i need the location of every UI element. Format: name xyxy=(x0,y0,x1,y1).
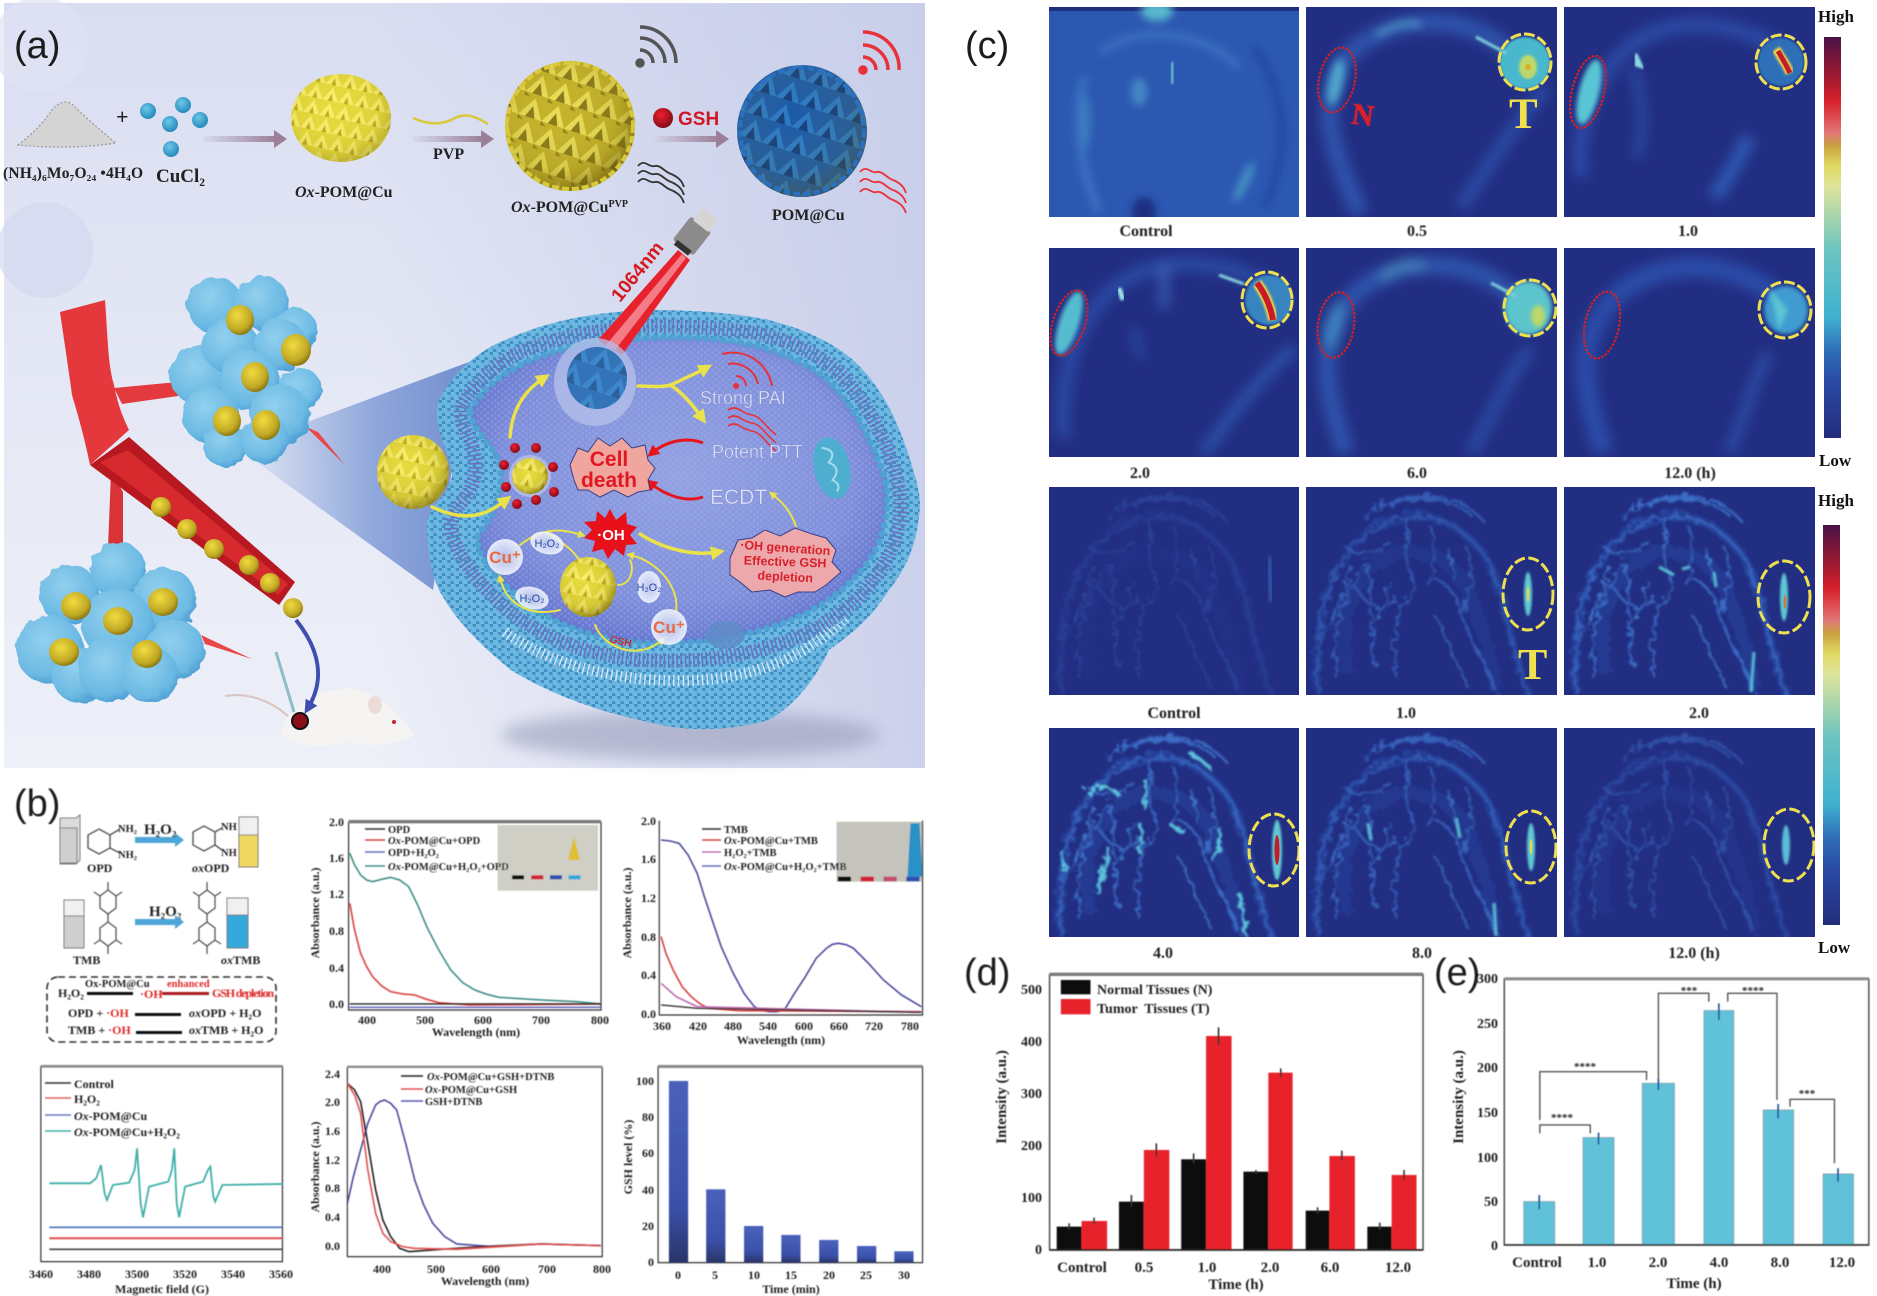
chart: GSH level bars xyxy=(621,1065,923,1296)
axis labels d: 300 xyxy=(1021,1087,1042,1102)
dashed box: reaction equations: enhanced xyxy=(167,979,210,990)
panel: (d) intensity bar chart xyxy=(964,952,1423,1293)
chart: TMB absorbance: 540 xyxy=(759,1019,777,1033)
burst: hydroxyl radical: ·OH xyxy=(597,527,625,544)
axis labels d: Control xyxy=(1057,1260,1107,1276)
text: CuCl2: CuCl₂ xyxy=(156,166,205,187)
reaction scheme: TMB: H₂O₂ xyxy=(149,904,182,920)
axis labels e: 8.0 xyxy=(1771,1255,1789,1271)
axis labels e: 150 xyxy=(1477,1106,1498,1121)
chart: TMB absorbance: 360 xyxy=(653,1019,671,1033)
arrows: red to cell death xyxy=(650,440,703,499)
chart: EPR spectra: 3460 xyxy=(29,1267,53,1281)
significance marks: *** xyxy=(1681,985,1698,997)
chart: OPD absorbance: 500 xyxy=(416,1013,434,1027)
lysosome blob xyxy=(705,621,745,649)
chart: GSH depletion spectra: 400 xyxy=(373,1262,391,1276)
axis labels e: 0 xyxy=(1491,1239,1498,1254)
chart: EPR spectra xyxy=(29,1065,293,1296)
image: 1.0 h row 3: T xyxy=(1518,640,1547,689)
chart: GSH depletion spectra: Absorbance (a.u.) xyxy=(308,1121,322,1213)
PVP curve xyxy=(413,116,488,124)
chart: OPD absorbance: 2.0 xyxy=(329,815,344,829)
text: ECDT: ECDT xyxy=(710,486,767,509)
panel: (a) mechanism schematic xyxy=(0,0,925,768)
bubbles: H2O2: H₂O₂ xyxy=(519,593,545,605)
reaction scheme: OPD xyxy=(60,815,258,875)
legend d: Tumor Tissues (T) xyxy=(1097,1002,1210,1017)
big nanoparticle entering xyxy=(377,435,449,509)
axis labels e: 300 xyxy=(1477,972,1498,987)
bars and frame xyxy=(1050,973,1423,1250)
axis labels d: 0 xyxy=(1035,1243,1042,1258)
chart: GSH level bars: 0 xyxy=(675,1268,681,1282)
image: 0.5 h: N xyxy=(1350,97,1376,133)
text: Ox-POM@Cu PVP: Ox-POM@Cu xyxy=(511,199,609,216)
chart: GSH level bars: 20 xyxy=(642,1219,654,1233)
text: GSH in cycle: GSH xyxy=(609,635,632,650)
chart: TMB absorbance: 780 xyxy=(901,1019,919,1033)
chart: TMB absorbance: Ox-POM@Cu+H₂O₂+TMB xyxy=(724,862,847,873)
icon: red signal in cell xyxy=(722,353,772,388)
axis labels e: 50 xyxy=(1484,1195,1498,1210)
label: (b): (b) xyxy=(14,783,60,825)
labels: top image rows xyxy=(1119,223,1716,482)
chart: EPR spectra: Control xyxy=(74,1077,114,1091)
colorbar bottom: Low xyxy=(1818,938,1851,957)
chart: TMB absorbance: 0.8 xyxy=(641,930,656,944)
axis labels d: 12.0 xyxy=(1385,1260,1411,1276)
axis labels d: 6.0 xyxy=(1321,1260,1339,1276)
tumour cluster lower xyxy=(16,542,205,703)
chart: OPD absorbance: 0.4 xyxy=(329,961,344,975)
chart: TMB absorbance: 1.6 xyxy=(641,852,656,866)
chart: GSH level bars: 100 xyxy=(636,1074,654,1088)
dashed box: reaction equations: TMB + ·OH xyxy=(68,1023,132,1037)
icon: molybdate powder xyxy=(18,102,116,147)
chart: TMB absorbance: 2.0 xyxy=(641,814,656,828)
axis labels e: 200 xyxy=(1477,1061,1498,1076)
central nanoparticle xyxy=(560,557,616,617)
significance marks: **** xyxy=(1742,985,1764,997)
dashed box: reaction equations: ·OH xyxy=(140,987,163,1001)
icon: red signal xyxy=(860,32,899,73)
axis labels d: Time (h) xyxy=(1208,1277,1264,1293)
chart: TMB absorbance: 600 xyxy=(795,1019,813,1033)
axis labels e: 1.0 xyxy=(1588,1255,1606,1271)
labels: top image rows: Control xyxy=(1119,223,1173,240)
chart: EPR spectra: 3500 xyxy=(125,1267,149,1281)
chart: OPD absorbance: 800 xyxy=(591,1013,609,1027)
label: (c): (c) xyxy=(965,25,1009,67)
labels: top image rows: 1.0 xyxy=(1678,223,1698,240)
axis labels e: 4.0 xyxy=(1710,1255,1728,1271)
icon: black heat waves xyxy=(638,163,684,203)
chart: TMB absorbance: 420 xyxy=(689,1019,707,1033)
axis labels d: 0.5 xyxy=(1135,1260,1153,1276)
laser head xyxy=(671,205,720,258)
sphere: Ox-POM@Cu xyxy=(291,74,391,162)
chart: GSH depletion spectra: 500 xyxy=(427,1262,445,1276)
chart: OPD absorbance: OPD+H₂O₂ xyxy=(388,848,439,859)
text: 1064nm: 1064nm xyxy=(608,238,668,306)
plus sign: + xyxy=(116,104,129,129)
nanoparticles in vessel xyxy=(151,497,303,618)
significance marks: **** xyxy=(1574,1061,1596,1073)
shadow of the cell xyxy=(500,711,880,759)
chart: TMB absorbance: 660 xyxy=(830,1019,848,1033)
chart: GSH level bars: 60 xyxy=(642,1146,654,1160)
axis labels d xyxy=(994,983,1411,1293)
chart: EPR spectra: 3540 xyxy=(221,1267,245,1281)
dashed box: reaction equations: Ox-POM@Cu xyxy=(85,979,150,990)
axis labels d: 100 xyxy=(1021,1191,1042,1206)
sphere: Ox-POM@Cu PVP xyxy=(505,61,635,191)
chart: GSH level bars: 30 xyxy=(898,1268,910,1282)
labels: lower image rows: 2.0 xyxy=(1689,705,1709,722)
image: 0.5 h: T xyxy=(1509,91,1538,138)
chart: GSH level bars: 40 xyxy=(642,1183,654,1197)
chart: GSH depletion spectra: 2.4 xyxy=(325,1067,340,1081)
bubble: Cu+ left xyxy=(487,539,523,575)
thorn vessels xyxy=(201,427,345,659)
chart: GSH level bars: 0 xyxy=(648,1255,654,1269)
chart: TMB absorbance: 480 xyxy=(724,1019,742,1033)
chart: GSH depletion spectra: 0.0 xyxy=(325,1239,340,1253)
image: 1.0 h row 3 xyxy=(1306,487,1557,695)
burst: OH generation callout: Effective GSH xyxy=(744,554,827,570)
chart: TMB absorbance: Wavelength (nm) xyxy=(737,1033,825,1047)
chart: OPD absorbance: Ox-POM@Cu+H₂O₂+OPD xyxy=(388,862,509,873)
bubbles: H2O2: H₂O₂ xyxy=(636,582,662,594)
chart: TMB absorbance: 0.4 xyxy=(641,968,656,982)
dashed box: reaction equations: H₂O₂ xyxy=(58,986,84,1000)
labels: lower image rows: 1.0 xyxy=(1396,705,1416,722)
axis labels e: 12.0 xyxy=(1829,1255,1855,1271)
labels: lower image rows: Control xyxy=(1147,705,1201,722)
chart: EPR spectra: Ox-POM@Cu xyxy=(74,1109,147,1123)
dashed box: reaction equations: OPD + ·OH xyxy=(68,1006,130,1020)
axis labels d: Intensity (a.u.) xyxy=(994,1050,1010,1144)
bubbles: H2O2 xyxy=(513,528,662,613)
mouse xyxy=(225,652,415,746)
chart: EPR spectra: Magnetic field (G) xyxy=(115,1282,209,1296)
chart: GSH level bars: 5 xyxy=(712,1268,718,1282)
chart: OPD absorbance: Wavelength (nm) xyxy=(432,1025,520,1039)
chart: GSH depletion spectra: 700 xyxy=(538,1262,556,1276)
label: (e): (e) xyxy=(1434,952,1480,994)
chart: OPD absorbance: 0.0 xyxy=(329,997,344,1011)
chart: TMB absorbance: 720 xyxy=(865,1019,883,1033)
chart: OPD absorbance xyxy=(308,815,609,1039)
image: 4.0 h xyxy=(1049,728,1299,937)
chart: OPD absorbance: 700 xyxy=(532,1013,550,1027)
labels: lower image rows: 12.0 (h) xyxy=(1668,945,1720,962)
chart: GSH depletion spectra xyxy=(308,1066,611,1288)
chart: GSH level bars: 15 xyxy=(785,1268,797,1282)
chart: OPD absorbance: OPD xyxy=(388,825,411,836)
image: 12.0 h xyxy=(1564,248,1815,457)
colorbar top xyxy=(1818,7,1854,470)
dashed box: reaction equations: GSH depletion xyxy=(212,986,274,1000)
axis labels e: 250 xyxy=(1477,1017,1498,1032)
chart: EPR spectra: H₂O₂ xyxy=(74,1092,100,1106)
bubble: Cu+ right: Cu⁺ xyxy=(653,618,685,637)
chart: GSH level bars: GSH level (%) xyxy=(621,1120,635,1194)
burst: OH generation callout: depletion xyxy=(757,569,813,585)
dashed box: reaction equations: oxTMB + H₂O xyxy=(189,1023,263,1037)
labels: lower image rows xyxy=(1147,705,1720,962)
reaction scheme: TMB xyxy=(64,882,260,967)
chart: OPD absorbance: 600 xyxy=(474,1013,492,1027)
text: Ox-POM@Cu PVP: PVP xyxy=(609,199,628,210)
icon: grey signal xyxy=(637,27,676,66)
dashed box: reaction equations: oxOPD + H₂O xyxy=(189,1006,261,1020)
image: 0.5 h xyxy=(1306,7,1557,217)
reaction scheme: OPD: NH₂ xyxy=(118,824,137,835)
chart: EPR spectra: 3560 xyxy=(269,1267,293,1281)
burst: OH generation callout xyxy=(730,528,841,597)
image: 8.0 h xyxy=(1306,728,1557,937)
image: control row 1 xyxy=(1049,7,1299,217)
arrow: injection xyxy=(296,620,318,708)
chart: TMB absorbance: H₂O₂+TMB xyxy=(724,848,777,859)
zoom cone xyxy=(237,362,469,590)
chart: OPD absorbance: Absorbance (a.u.) xyxy=(308,867,322,959)
labels: lower image rows: 4.0 xyxy=(1153,945,1173,962)
reaction scheme: OPD: NH₂ xyxy=(118,850,137,861)
chart: TMB absorbance: Absorbance (a.u.) xyxy=(620,867,634,959)
chart: GSH depletion spectra: Ox-POM@Cu+GSH+DTNB xyxy=(427,1072,554,1083)
image: 1.0 h xyxy=(1564,7,1815,217)
significance marks xyxy=(1551,985,1816,1124)
legend d xyxy=(1097,983,1213,1017)
chart: GSH depletion spectra: GSH+DTNB xyxy=(425,1097,482,1108)
panel: (c) photoacoustic imaging xyxy=(965,1,1854,962)
axis labels e: Control xyxy=(1512,1255,1562,1271)
POM in vesicle xyxy=(554,338,636,426)
chart: GSH level bars: 80 xyxy=(642,1110,654,1124)
image: 2.0 h xyxy=(1049,248,1299,457)
axis labels e: 2.0 xyxy=(1649,1255,1667,1271)
blood vessel xyxy=(60,300,295,605)
axis labels d: 500 xyxy=(1021,983,1042,998)
chart: GSH depletion spectra: 0.8 xyxy=(325,1181,340,1195)
colorbar bottom xyxy=(1818,491,1854,957)
bubble: Cu+ left: Cu⁺ xyxy=(489,548,521,567)
text: POM@Cu: POM@Cu xyxy=(772,207,845,224)
text: ammonium molybdate: (NH₄)₆Mo₇O₂₄ •4H₄O xyxy=(3,165,143,182)
chart: TMB absorbance: TMB xyxy=(724,825,748,836)
icon: red heat waves xyxy=(860,169,906,213)
axis labels e: Intensity (a.u.) xyxy=(1451,1050,1467,1144)
laser beam xyxy=(598,250,690,355)
chart: GSH level bars: 10 xyxy=(748,1268,760,1282)
chart: OPD absorbance: 1.2 xyxy=(329,887,344,901)
icon: GSH ball xyxy=(653,108,673,128)
bubble: Cu+ right xyxy=(651,609,687,645)
chart: TMB absorbance: 1.2 xyxy=(641,891,656,905)
colorbar top: High xyxy=(1818,7,1854,26)
chart: GSH depletion spectra: 1.6 xyxy=(325,1124,340,1138)
chart: EPR spectra: Ox-POM@Cu+H₂O₂ xyxy=(74,1125,180,1139)
label: (a): (a) xyxy=(14,25,60,67)
chart: EPR spectra: 3480 xyxy=(77,1267,101,1281)
chart: TMB absorbance: Ox-POM@Cu+TMB xyxy=(724,836,818,847)
text: Potent PTT: Potent PTT xyxy=(712,442,803,462)
chart: GSH level bars: Time (min) xyxy=(762,1282,820,1296)
chart: GSH depletion spectra: 800 xyxy=(593,1262,611,1276)
burst: OH generation callout: ·OH generation xyxy=(740,538,831,558)
chart: GSH level bars: 20 xyxy=(823,1268,835,1282)
burst: Cell death: Cell xyxy=(590,448,628,471)
colorbar top: Low xyxy=(1819,451,1852,470)
axis labels d: 1.0 xyxy=(1198,1260,1216,1276)
chart: GSH depletion spectra: 0.4 xyxy=(325,1210,340,1224)
sphere: POM@Cu xyxy=(737,65,867,197)
icon: CuCl2 dots xyxy=(140,97,208,157)
tumour cluster upper xyxy=(170,276,322,467)
image: control row 3 xyxy=(1049,487,1299,695)
significance marks: **** xyxy=(1551,1112,1574,1124)
dashed box: reaction equations xyxy=(47,977,276,1042)
significance marks: *** xyxy=(1799,1088,1816,1100)
chart: GSH depletion spectra: 600 xyxy=(482,1262,500,1276)
chart: GSH depletion spectra: Ox-POM@Cu+GSH xyxy=(425,1085,517,1096)
text: Ox-POM@Cu: Ox-POM@Cu xyxy=(295,184,393,201)
labels: top image rows: 2.0 xyxy=(1130,465,1150,482)
chart: TMB absorbance xyxy=(620,814,923,1047)
chart: GSH depletion spectra: 2.0 xyxy=(325,1095,340,1109)
axis labels e: 100 xyxy=(1477,1151,1498,1166)
axis labels d: 400 xyxy=(1021,1035,1042,1050)
chart: GSH level bars: 25 xyxy=(860,1268,872,1282)
panel: (e) intensity bar chart xyxy=(1434,952,1869,1292)
labels: top image rows: 6.0 xyxy=(1407,465,1427,482)
text: Strong PAI: Strong PAI xyxy=(700,388,786,408)
text: PVP: PVP xyxy=(433,146,464,163)
text: GSH: GSH xyxy=(678,109,719,130)
axis labels d: 200 xyxy=(1021,1139,1042,1154)
reaction scheme: TMB: oxTMB xyxy=(221,953,260,967)
colorbar bottom: High xyxy=(1818,491,1854,510)
chart: GSH depletion spectra: 1.2 xyxy=(325,1153,340,1167)
arrow: to POM@Cu xyxy=(649,130,729,148)
labels: top image rows: 0.5 xyxy=(1407,223,1427,240)
chart: OPD absorbance: 1.6 xyxy=(329,851,344,865)
mitochondrion xyxy=(808,434,856,502)
cell xyxy=(427,310,920,729)
axis labels e xyxy=(1451,972,1855,1292)
chart: OPD absorbance: Ox-POM@Cu+OPD xyxy=(388,836,481,847)
chart: OPD absorbance: 0.8 xyxy=(329,924,344,938)
image: 2.0 h row 3 xyxy=(1564,487,1815,695)
axis labels d: 2.0 xyxy=(1261,1260,1279,1276)
legend d: Normal Tissues (N) xyxy=(1097,983,1213,998)
arrow: to Ox-POM@Cu xyxy=(204,130,287,148)
bars, frame and brackets xyxy=(1504,977,1869,1245)
axis labels e: Time (h) xyxy=(1666,1276,1722,1292)
reaction scheme: OPD: H₂O₂ xyxy=(144,822,177,838)
chart: GSH depletion spectra: Wavelength (nm) xyxy=(441,1274,529,1288)
reaction scheme: OPD: OPD xyxy=(87,861,113,875)
reaction scheme: TMB: TMB xyxy=(73,953,100,967)
reaction scheme: OPD: oxOPD xyxy=(192,861,230,875)
burst: hydroxyl radical xyxy=(584,509,637,559)
icon: red waves in cell xyxy=(728,408,776,451)
panel: (b) catalysis charts xyxy=(14,783,923,1296)
arrows: yellow pathway xyxy=(432,368,796,651)
arrow: to Ox-POM@Cu PVP xyxy=(413,130,494,148)
labels: lower image rows: 8.0 xyxy=(1412,945,1432,962)
chart: OPD absorbance: 400 xyxy=(358,1013,376,1027)
image: 12.0 h row 4 xyxy=(1564,728,1815,937)
label: (d): (d) xyxy=(964,952,1010,994)
bubbles: H2O2: H₂O₂ xyxy=(534,538,560,550)
chart: TMB absorbance: 0.0 xyxy=(641,1007,656,1021)
burst: Cell death xyxy=(570,438,655,497)
burst: Cell death: death xyxy=(581,469,637,492)
chart: EPR spectra: 3520 xyxy=(173,1267,197,1281)
small nanoparticle with copper ions xyxy=(499,443,559,509)
image: 6.0 h xyxy=(1306,248,1557,457)
reaction scheme: OPD: NH xyxy=(221,822,237,833)
labels: top image rows: 12.0 (h) xyxy=(1664,465,1716,482)
reaction scheme: OPD: NH xyxy=(221,848,237,859)
